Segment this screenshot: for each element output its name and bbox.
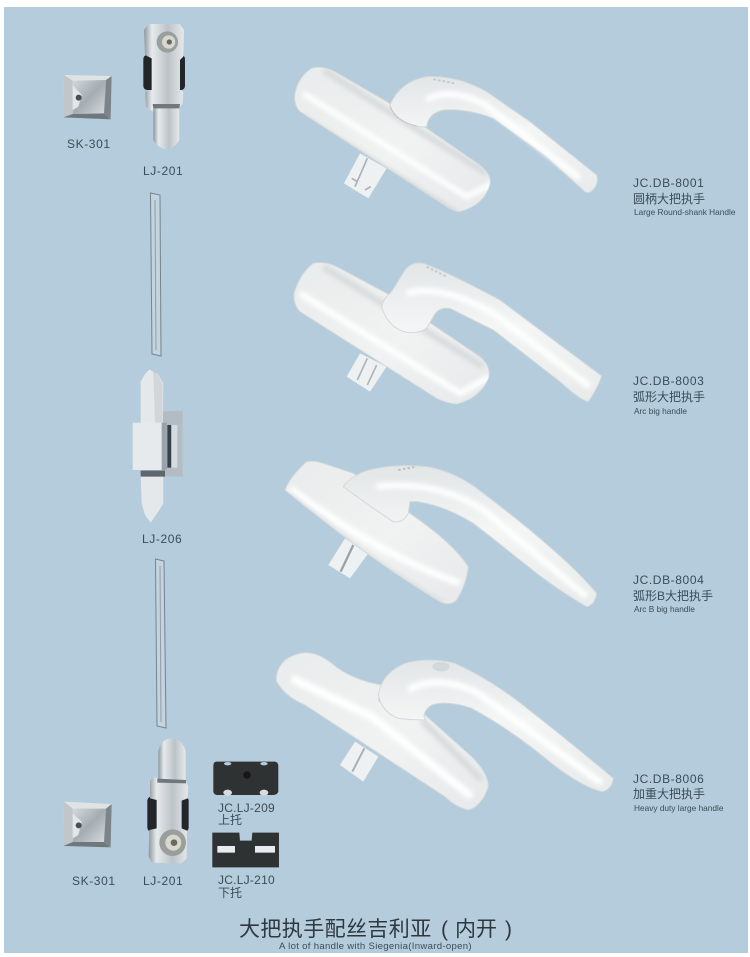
label: JC.DB-8001 [633, 176, 736, 217]
label: JC.DB-8006: 加重大把执手 [633, 787, 705, 801]
icon: JC.LJ-210 black block [212, 833, 279, 867]
label: JC.DB-8004: 弧形B大把执手 [633, 589, 713, 603]
label: JC.DB-8004: Arc B big handle [634, 604, 695, 614]
label: JC.DB-8006: JC.DB-8006 [633, 772, 704, 786]
label: JC.LJ-209: 上托 [218, 813, 242, 827]
icon: handle JC.DB-8003 [294, 263, 602, 404]
label: JC.DB-8003: JC.DB-8003 [633, 374, 704, 388]
label: JC.DB-8004 [633, 573, 713, 614]
icon: handle JC.DB-8001 [295, 67, 597, 213]
label: LJ-201 top: LJ-201 [143, 164, 183, 178]
label: JC.LJ-209 [218, 801, 275, 827]
label: LJ-201 bottom: LJ-201 [143, 874, 183, 888]
label: JC.DB-8006 [633, 772, 724, 813]
label: JC.DB-8004: JC.DB-8004 [633, 573, 704, 587]
label: JC.DB-8003: 弧形大把执手 [633, 390, 705, 404]
icon: SK-301 top [63, 75, 112, 119]
title: ) [505, 918, 512, 941]
title: ( [441, 918, 448, 941]
label: JC.DB-8001: JC.DB-8001 [633, 176, 704, 190]
icon: SK-301 bottom [63, 802, 112, 847]
icon: strip lower [156, 559, 166, 728]
label: JC.DB-8003 [633, 374, 705, 416]
label: JC.LJ-210: 下托 [218, 886, 242, 900]
icon: strip upper [150, 193, 161, 356]
label: LJ-206: LJ-206 [142, 532, 182, 546]
icon: LJ-206 [133, 369, 183, 523]
label: SK-301 bottom: SK-301 [72, 874, 116, 888]
icon: handle JC.DB-8004 [285, 461, 597, 607]
title: A lot of handle with Siegenia(Inward-open) [279, 941, 472, 952]
icon: JC.LJ-209 black block [213, 762, 278, 796]
label: JC.DB-8001: 圆柄大把执手 [633, 192, 705, 206]
label: JC.DB-8001: Large Round-shank Handle [634, 207, 736, 217]
icon: handle JC.DB-8006 [276, 653, 613, 810]
title: 内开 [455, 918, 497, 941]
title: 大把执手配丝吉利亚 [239, 918, 432, 941]
label: JC.LJ-209: JC.LJ-209 [218, 801, 275, 815]
title [239, 918, 512, 952]
icon: LJ-201 top [143, 24, 185, 149]
label: SK-301 top: SK-301 [67, 137, 111, 151]
icon: LJ-201 bottom [147, 738, 189, 863]
label: JC.LJ-210 [218, 873, 275, 900]
label: JC.DB-8003: Arc big handle [634, 406, 687, 416]
label: JC.LJ-210: JC.LJ-210 [218, 873, 275, 887]
label: JC.DB-8006: Heavy duty large handle [634, 803, 724, 813]
